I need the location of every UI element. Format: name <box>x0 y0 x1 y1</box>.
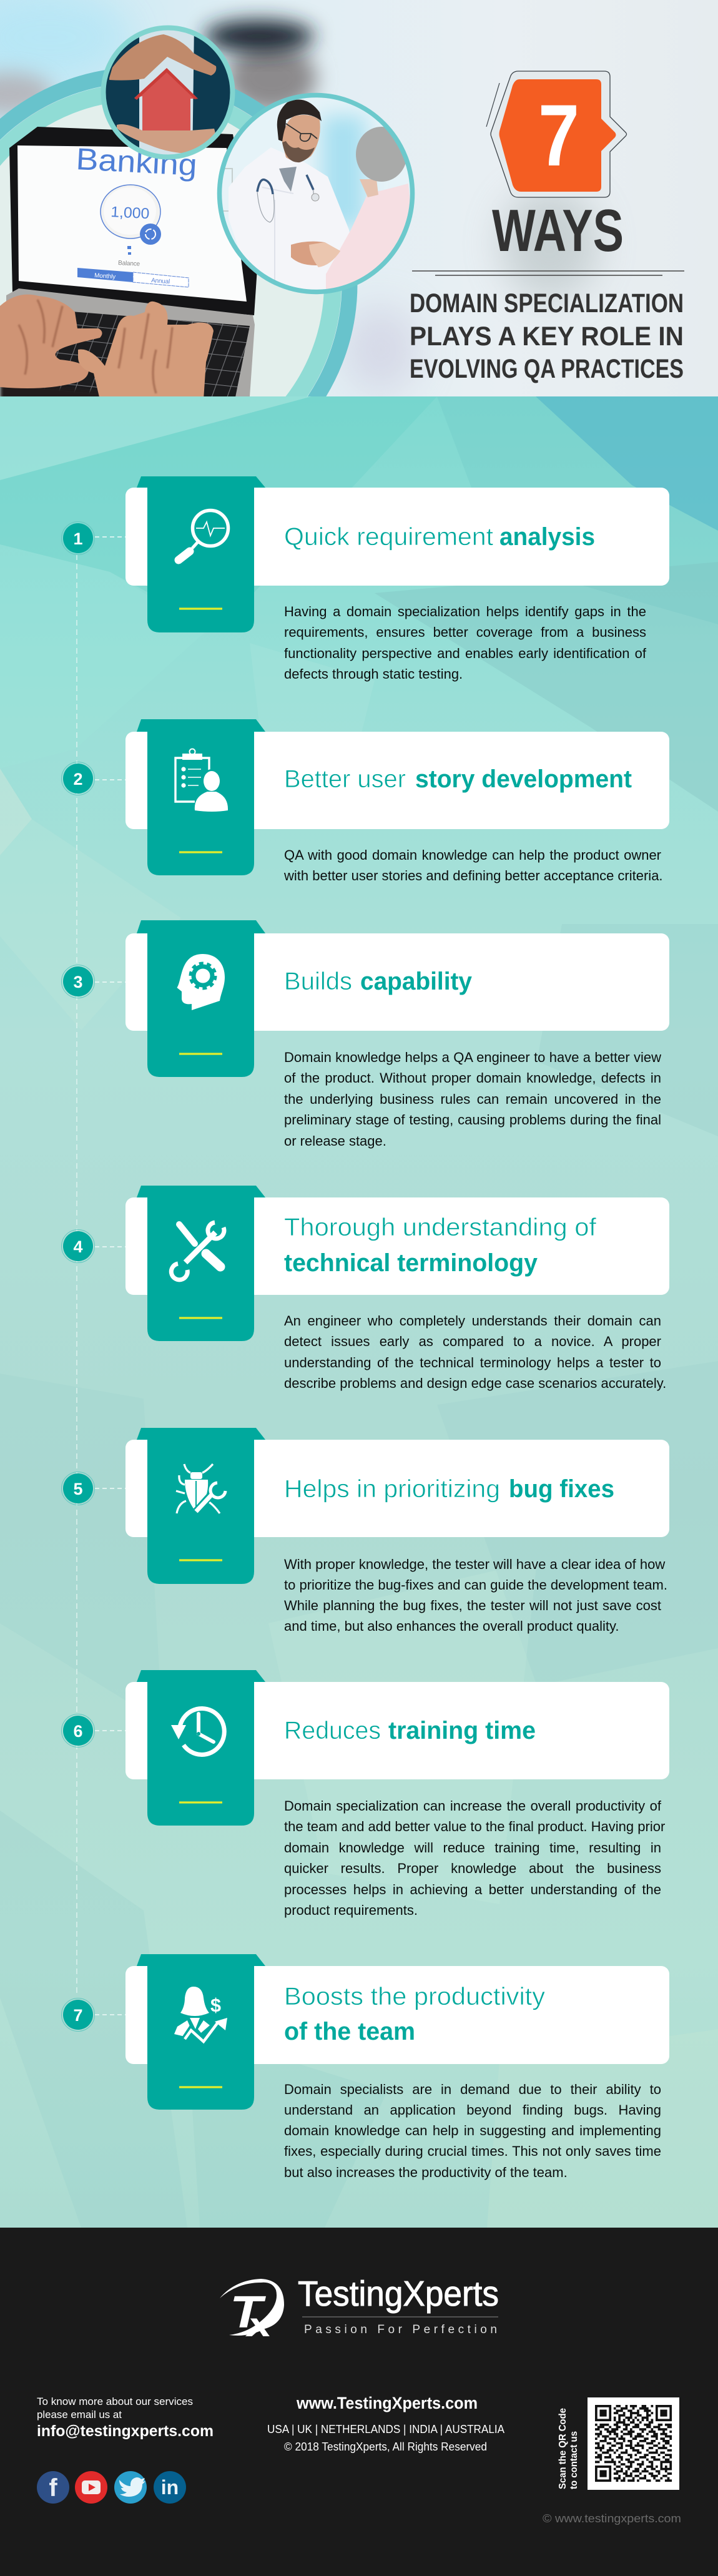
heading 6: Reduces <box>284 1717 381 1744</box>
number badge 2 <box>61 762 95 795</box>
icon: businesswoman with rising chart: $ <box>210 1994 221 2016</box>
card 6 <box>125 1682 669 1779</box>
heading 3: Builds <box>284 968 352 995</box>
text block: step 5: to prioritize the bug-fixes and can guide the development team. <box>284 1577 667 1593</box>
icon: twitter <box>114 2471 147 2504</box>
heading 7: of the team <box>284 2018 415 2045</box>
hands on keyboard <box>0 295 214 400</box>
icon: facebook <box>37 2471 69 2504</box>
step 2: better user story development <box>61 719 669 875</box>
website and offices <box>267 2394 504 2453</box>
badge: number 7: 7 <box>538 86 579 184</box>
text block: step 6: quicker results. Proper knowledge about the business <box>284 1861 661 1876</box>
text block: step 7: but also increases the productivity of the team. <box>284 2165 568 2180</box>
photo: circular ring with laptop: Annual <box>151 277 170 285</box>
text block: step 4: understanding of the technical terminology helps a tester to <box>284 1355 661 1370</box>
text block: step 6 <box>284 1798 665 1918</box>
icon: youtube <box>75 2471 107 2504</box>
text block: step 1: Having a domain specialization helps identify gaps in the <box>284 604 646 619</box>
card 3 <box>125 933 669 1031</box>
heading 4 <box>284 1214 597 1277</box>
icon: linkedin <box>154 2471 186 2504</box>
logo: TestingXperts: Passion For Perfection <box>304 2323 497 2336</box>
heading 1: Quick requirement <box>284 523 493 551</box>
text block: step 3: or release stage. <box>284 1133 386 1149</box>
icon: businesswoman with rising chart <box>174 1987 227 2042</box>
number badge 2: 2 <box>73 770 83 789</box>
icon: clipboard with person <box>175 749 228 812</box>
text block: step 3: Domain knowledge helps a QA engineer to have a better view <box>284 1050 661 1065</box>
step 3: builds capability <box>61 920 669 1077</box>
ribbon tab 7 <box>137 1954 265 2110</box>
heading 6 <box>284 1717 536 1744</box>
text block: step 6: product requirements. <box>284 1902 418 1918</box>
text block: step 6: processes helps in achieving a better understanding of the <box>284 1882 661 1897</box>
step 6: reduces training time <box>61 1670 669 1826</box>
heading 7: Boosts the productivity <box>284 1983 545 2010</box>
number badge 5: 5 <box>73 1480 83 1498</box>
step 4: technical terminology <box>61 1186 669 1341</box>
icon: bug with wrench <box>176 1464 225 1513</box>
heading 7 <box>284 1983 545 2045</box>
number badge 7: 7 <box>73 2006 83 2025</box>
website and offices: www.TestingXperts.com <box>296 2394 478 2412</box>
text block: step 1: requirements, ensures better coverage from a business <box>284 624 646 640</box>
photo: doctor and patient <box>220 95 412 293</box>
number badge 7 <box>61 1998 95 2032</box>
photo: circular ring with laptop: 1,000 <box>111 204 150 222</box>
contact text: To know more about our services <box>37 2396 193 2407</box>
number badge 6: 6 <box>73 1722 83 1741</box>
icon: clock with arrow <box>171 1708 224 1754</box>
card 4 <box>125 1197 669 1295</box>
QR code <box>588 2397 679 2490</box>
icon: facebook: f <box>49 2474 57 2502</box>
heading 3: capability <box>360 968 473 995</box>
card 7 <box>125 1966 669 2064</box>
text block: step 3 <box>284 1050 661 1149</box>
ribbon tab 2 <box>137 719 265 875</box>
header banner <box>0 0 718 396</box>
logo: TestingXperts: x <box>245 2306 274 2344</box>
timeline dashed line <box>76 554 77 1997</box>
text block: step 7: understand an application beyond finding bugs. Having <box>284 2102 661 2118</box>
QR caption: Scan the QR Code <box>558 2408 568 2489</box>
ribbon tab 5 <box>137 1428 265 1584</box>
card 1 <box>125 488 669 586</box>
number badge 1: 1 <box>73 529 83 548</box>
heading 5 <box>284 1475 614 1503</box>
text block: step 1: functionality perspective and enables early identification of <box>284 646 646 661</box>
text block: step 6: the team and add better value to the final product. Having prior <box>284 1819 665 1834</box>
website and offices: © 2018 TestingXperts, All Rights Reserved <box>284 2441 487 2453</box>
number badge 1 <box>61 522 95 554</box>
photo: circular ring with laptop <box>0 70 357 396</box>
heading 4: Thorough understanding of <box>284 1214 597 1241</box>
heading 5: Helps in prioritizing <box>284 1475 500 1503</box>
icon: crossed tools <box>171 1222 224 1280</box>
ribbon tab 3 <box>137 920 265 1077</box>
ribbon tab 6 <box>137 1670 265 1826</box>
icon: head with gear <box>177 954 225 1010</box>
text block: step 3: preliminary stage of testing, causing problems during the final <box>284 1112 661 1128</box>
ribbon tab 4 <box>137 1186 265 1341</box>
step 7: boosts productivity <box>61 1954 669 2110</box>
number badge 4 <box>61 1230 95 1262</box>
photo: house in hands <box>104 25 232 162</box>
contact text: please email us at <box>37 2409 122 2421</box>
card 5 <box>125 1440 669 1537</box>
teal faceted background <box>0 396 718 2228</box>
heading 3 <box>284 968 473 995</box>
text block: step 7: Domain specialists are in demand due to their ability to <box>284 2082 661 2097</box>
card 2 <box>125 732 669 829</box>
photo: circular ring with laptop: Balance <box>118 260 140 268</box>
text block: step 4: describe problems and design edge case scenarios accurately. <box>284 1375 666 1391</box>
heading: subtitle: PLAYS A KEY ROLE IN <box>410 322 684 351</box>
screen: banking text: Banking <box>75 142 198 182</box>
text block: step 5 <box>284 1556 667 1634</box>
heading 1 <box>284 523 595 551</box>
logo: TestingXperts: TestingXperts <box>298 2274 499 2314</box>
text block: step 2: with better user stories and defining better acceptance criteria. <box>284 868 663 883</box>
icon: linkedin: in <box>161 2476 179 2499</box>
text block: step 5: While planning the bug fixes, the tester will not just save cost <box>284 1598 661 1613</box>
heading 5: bug fixes <box>509 1475 614 1503</box>
heading 1: analysis <box>499 523 595 551</box>
text block: step 6: Domain specialization can increase the overall productivity of <box>284 1798 661 1814</box>
contact text <box>37 2396 214 2440</box>
text block: step 4: detect issues early as compared to a novice. A proper <box>284 1334 661 1349</box>
text block: step 4: An engineer who completely understands their domain can <box>284 1313 661 1329</box>
text block: step 1: defects through static testing. <box>284 666 463 682</box>
text block: step 7: fixes, especially during crucial times. This not only saves time <box>284 2143 661 2159</box>
step 1: quick requirement analysis <box>61 476 669 632</box>
copyright url: © www.testingxperts.com <box>543 2512 681 2525</box>
icon: magnifier with pulse <box>179 511 229 560</box>
text block: step 5: With proper knowledge, the tester will have a clear idea of how <box>284 1556 665 1572</box>
step 5: bug fixes <box>61 1428 669 1584</box>
footer panel <box>0 2228 718 2576</box>
text block: step 7: domain knowledge can help in suggesting and implementing <box>284 2123 661 2138</box>
text block: step 6: domain knowledge will reduce training time, resulting in <box>284 1840 661 1856</box>
photo: circular ring with laptop: Monthly <box>94 272 116 280</box>
heading 2: story development <box>415 765 632 793</box>
badge: number 7 <box>486 71 627 197</box>
ribbon tab 1 <box>137 476 265 632</box>
heading: subtitle <box>410 288 684 384</box>
number badge 4: 4 <box>73 1237 83 1256</box>
logo: TestingXperts <box>220 2274 499 2344</box>
number badge 3 <box>61 965 95 998</box>
text block: step 2: QA with good domain knowledge can help the product owner <box>284 847 661 863</box>
contact text: info@testingxperts.com <box>37 2422 214 2440</box>
logo: TestingXperts: T <box>230 2288 267 2338</box>
heading 6: training time <box>388 1717 536 1744</box>
heading 4: technical terminology <box>284 1249 538 1277</box>
heading 2: Better user <box>284 765 406 793</box>
text block: step 5: and time, but also enhances the overall product quality. <box>284 1618 619 1634</box>
text block: step 3: the underlying business rules can remain uncovered in the <box>284 1091 661 1107</box>
heading 2 <box>284 765 632 793</box>
text block: step 3: of the product. Without proper domain knowledge, defects in <box>284 1070 661 1086</box>
QR caption <box>558 2408 579 2489</box>
text block: step 2 <box>284 847 663 883</box>
heading: WAYS: WAYS <box>492 197 624 264</box>
number badge 3: 3 <box>73 973 83 991</box>
website and offices: USA | UK | NETHERLANDS | INDIA | AUSTRALIA <box>267 2423 504 2436</box>
QR caption: to contact us <box>569 2431 579 2489</box>
number badge 6 <box>61 1714 95 1747</box>
text block: step 4 <box>284 1313 666 1391</box>
social icons <box>37 2471 186 2504</box>
number badge 5 <box>61 1472 95 1505</box>
text block: step 1 <box>284 604 647 682</box>
text block: step 7 <box>284 2082 661 2180</box>
